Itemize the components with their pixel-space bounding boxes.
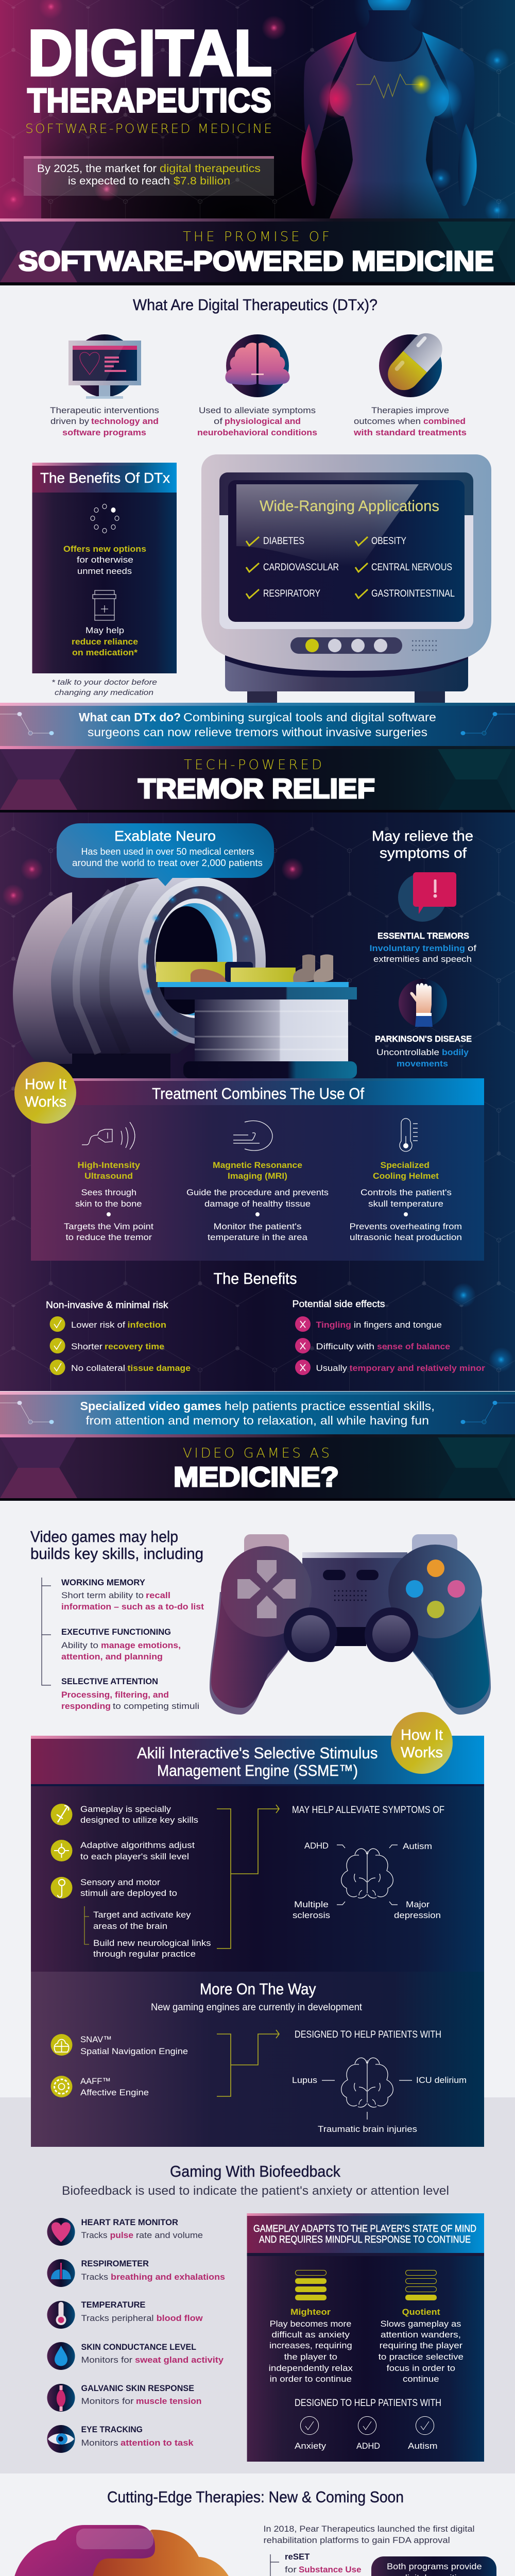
heading: what are digital therapeutics: What Are Digital Therapeutics (DTx)? <box>133 296 377 314</box>
column: Quotient <box>379 2270 464 2384</box>
callout: market size: is expected to reach <box>68 175 170 187</box>
list: how the engine works: to each player's skill level <box>80 1852 189 1861</box>
section heading band: tech-powered tremor relief: TREMOR RELIEF <box>138 773 375 804</box>
callout: Exablate Neuro: Exablate Neuro <box>114 828 216 844</box>
column: high-intensity ultrasound <box>64 1122 153 1242</box>
list: key skills <box>42 1578 204 1711</box>
panel: benefits of DTx <box>32 463 177 673</box>
column: Mighteor: Mighteor <box>290 2307 331 2317</box>
section heading band: tech-powered tremor relief <box>0 746 515 812</box>
footnote: changing any medication <box>55 688 153 697</box>
item: skin conductance level <box>47 2342 224 2370</box>
list: how the engine works: Gameplay is specially <box>80 1804 171 1814</box>
panel: gameplay adapts: GAMEPLAY ADAPTS TO THE PLAYER'S STATE OF MIND <box>253 2224 476 2234</box>
icon: ultrasound probe <box>82 1122 135 1149</box>
item: SNAV: Spatial Navigation Engine <box>80 2046 188 2056</box>
column: MRI: Guide the procedure and prevents <box>186 1188 329 1197</box>
list: potential side effects: sense of balance <box>377 1342 450 1351</box>
text: reSET programs <box>264 2524 475 2576</box>
column: MRI: damage of healthy tissue <box>204 1199 311 1209</box>
column: high-intensity ultrasound: Ultrasound <box>84 1171 133 1181</box>
callout: Exablate Neuro: around the world to treat over 2,000 patients <box>72 858 263 868</box>
item: respirometer: RESPIROMETER <box>81 2259 149 2268</box>
checks: anxiety, ADHD, autism: Autism <box>408 2441 438 2451</box>
title <box>27 18 272 120</box>
text: reduce reliance <box>72 625 138 657</box>
icon: monitor with heart <box>68 334 141 399</box>
list: potential side effects <box>293 1299 485 1375</box>
heading: The Benefits Of DTx <box>40 470 170 486</box>
column: Mighteor <box>269 2270 353 2384</box>
badge: how it works <box>14 1062 76 1124</box>
list: non-invasive benefits: tissue damage <box>128 1363 191 1373</box>
text: Parkinson's disease: movements <box>397 1059 448 1069</box>
list: key skills: WORKING MEMORY <box>61 1578 146 1587</box>
arrow: bracket to patients <box>217 2030 279 2096</box>
text: combined with standard treatments: combined <box>423 416 466 426</box>
section heading band: the promise of software-powered medicine: THE PROMISE OF <box>183 229 330 245</box>
callout: both programs: Both programs provide <box>387 2562 482 2571</box>
section heading band: video games as medicine: MEDICINE? <box>174 1462 339 1493</box>
item: temperature: blood flow <box>157 2313 203 2323</box>
diagram: brain with disorders: Lupus <box>292 2075 317 2085</box>
text: combined with standard treatments: Therapies improve <box>371 405 449 415</box>
item: eye tracking: EYE TRACKING <box>81 2425 143 2434</box>
text: Parkinson's disease: PARKINSON'S DISEASE <box>375 1034 472 1044</box>
text: technology and software: Therapeutic interventions <box>50 405 159 415</box>
column: Quotient: continue <box>403 2374 439 2384</box>
text: reSET programs: for <box>285 2565 297 2574</box>
column: Mighteor: the player to <box>284 2352 337 2362</box>
list: how the engine works: Target and activate key <box>93 1910 191 1920</box>
callout: market size: $7.8 billion <box>174 175 230 187</box>
list: key skills: EXECUTIVE FUNCTIONING <box>61 1627 171 1637</box>
panel: treatment combines the use of: Treatment Combines The Use Of <box>152 1084 364 1103</box>
column: Mighteor: Play becomes more <box>270 2319 351 2329</box>
item: heart rate monitor: Tracks <box>81 2230 107 2240</box>
text: physiological and neurobehavioral: Used to alleviate symptoms <box>199 405 316 415</box>
checklist: CENTRAL NERVOUS <box>371 562 452 573</box>
item: galvanic skin response: muscle tension <box>136 2396 202 2406</box>
text: physiological and neurobehavioral: neurobehavioral conditions <box>197 428 317 437</box>
column: Mighteor: increases, requiring <box>269 2341 352 2350</box>
column: cooling helmet: Cooling Helmet <box>373 1171 439 1181</box>
arrow: bracket to symptoms <box>217 1805 279 1948</box>
list: potential side effects: Tingling <box>316 1320 351 1330</box>
icon: controller buttons <box>406 1560 465 1618</box>
heading: the benefits: The Benefits <box>213 1269 297 1287</box>
heading: gaming with biofeedback <box>62 2162 449 2198</box>
column: high-intensity ultrasound: Sees through <box>81 1188 136 1197</box>
control buttons <box>290 637 437 654</box>
diagram: brain with disorders: Traumatic brain injuries <box>318 2124 417 2134</box>
diagram: brain with conditions: Major <box>406 1900 430 1909</box>
text: essential tremors: extremities and speech <box>373 954 472 964</box>
text: Parkinson's disease <box>375 1034 472 1069</box>
text: physiological and neurobehavioral: physiological and <box>225 416 301 426</box>
list: how the engine works: through regular practice <box>93 1949 196 1959</box>
footnote: * talk to your doctor before <box>52 678 157 687</box>
list: how the engine works: stimuli are deployed to <box>80 1888 177 1898</box>
column: cooling helmet <box>349 1118 462 1242</box>
text: designed to help patients with: DESIGNED TO HELP PATIENTS WITH <box>295 2398 441 2409</box>
list: biofeedback sensors <box>47 2217 225 2453</box>
checklist <box>246 536 455 599</box>
illustration: MRI machine with patient <box>13 877 357 1078</box>
list: how the engine works <box>50 1804 211 1959</box>
footnote <box>52 678 157 697</box>
item: respirometer: Tracks <box>81 2272 108 2282</box>
diagram: brain with conditions: Autism <box>403 1841 432 1851</box>
illustration: colorful brain <box>12 2525 244 2576</box>
text: reSET programs: reSET <box>285 2552 310 2562</box>
list: key skills: responding <box>61 1701 111 1711</box>
text: new options: Offers new options <box>63 544 146 554</box>
title: THERAPEUTICS <box>27 81 271 120</box>
list: key skills: recall <box>146 1590 170 1600</box>
list: potential side effects: Difficulty with <box>316 1342 374 1351</box>
text: combined with standard treatments: with standard treatments <box>353 428 467 437</box>
text: designed to help patients with: DESIGNED TO HELP PATIENTS WITH <box>295 2029 441 2040</box>
item: skin conductance level: SKIN CONDUCTANCE LEVEL <box>81 2342 196 2352</box>
panel: more on the way: More On The Way <box>200 1980 316 1998</box>
callout: Exablate Neuro <box>57 823 274 886</box>
callout: market size: digital therapeutics <box>160 163 261 175</box>
column: cooling helmet: Controls the patient's <box>360 1188 452 1197</box>
column: Quotient: Quotient <box>402 2307 440 2317</box>
checks: anxiety, ADHD, autism: Anxiety <box>295 2441 327 2451</box>
list: non-invasive benefits: Lower risk of <box>71 1320 125 1330</box>
callout: what can DTx do: What can DTx do? <box>79 710 181 724</box>
column: Quotient: focus in order to <box>387 2363 455 2373</box>
panel: more on the way: New gaming engines are currently in development <box>151 2002 363 2013</box>
callout: market size <box>24 156 274 196</box>
text: reSET programs: Substance Use <box>299 2565 362 2574</box>
text: Parkinson's disease: Uncontrollable <box>376 1047 439 1057</box>
section background: biofeedback <box>0 2097 515 2473</box>
diagram: brain with conditions: depression <box>394 1910 441 1920</box>
badge: how it works: How It <box>25 1076 66 1093</box>
text: technology and software <box>50 405 159 437</box>
heading: gaming with biofeedback: Biofeedback is used to indicate the patient's anxiety or attention level <box>62 2184 449 2198</box>
text: combined with standard treatments <box>353 405 467 437</box>
section heading band: video games as medicine <box>0 1434 515 1501</box>
icon: joysticks <box>284 1607 418 1662</box>
list: key skills: SELECTIVE ATTENTION <box>61 1676 158 1686</box>
item: eye tracking: Monitors <box>81 2438 118 2448</box>
text: may help alleviate symptoms of: MAY HELP ALLEVIATE SYMPTOMS OF <box>292 1805 444 1816</box>
item: SNAV: SNAV™ <box>80 2035 112 2044</box>
item: heart rate monitor: HEART RATE MONITOR <box>81 2217 178 2227</box>
column: Quotient: attention wanders, <box>381 2330 461 2340</box>
panel: Akili Interactive SSME: Akili Interactive's Selective Stimulus <box>137 1744 378 1762</box>
text: combined with standard treatments: outcomes when <box>354 416 421 426</box>
heading: video games build key skills: Video games may help <box>30 1528 178 1546</box>
callout: specialized video games <box>0 1392 515 1434</box>
icon: brain <box>226 334 289 397</box>
text: physiological and neurobehavioral <box>197 405 317 437</box>
item: heart rate monitor <box>47 2217 203 2246</box>
diagram: brain with conditions: Multiple <box>294 1900 329 1909</box>
badge: how it works <box>391 1712 453 1774</box>
list: non-invasive benefits: Non-invasive & minimal risk <box>46 1300 169 1310</box>
checklist: DIABETES <box>263 536 304 547</box>
list: non-invasive benefits <box>46 1300 191 1375</box>
checklist: RESPIRATORY <box>263 588 320 599</box>
text: technology and software: software programs <box>62 428 146 437</box>
column: MRI: Imaging (MRI) <box>228 1171 287 1181</box>
item: respirometer <box>47 2259 225 2287</box>
callout: what can DTx do: Combining surgical tools and digital software <box>183 710 436 724</box>
column: Mighteor: in order to continue <box>270 2374 352 2384</box>
list: potential side effects: in fingers and tongue <box>354 1320 442 1330</box>
item: temperature: TEMPERATURE <box>81 2300 145 2310</box>
callout: specialized video games: from attention and memory to relaxation, all while having fun <box>85 1414 429 1427</box>
checks: anxiety, ADHD, autism: ADHD <box>356 2441 380 2451</box>
list: how the engine works: Adaptive algorithms adjust <box>80 1840 195 1850</box>
section heading band: video games as medicine: VIDEO GAMES AS <box>183 1446 330 1461</box>
text: reduce reliance: reduce reliance <box>72 637 138 647</box>
item: heart rate monitor: pulse <box>110 2230 133 2240</box>
list: key skills: Processing, filtering, and <box>61 1690 169 1700</box>
column: high-intensity ultrasound: High-Intensity <box>77 1160 141 1170</box>
text: essential tremors <box>370 931 476 964</box>
item: eye tracking <box>47 2425 194 2453</box>
section heading band: the promise of software-powered medicine <box>0 218 515 285</box>
list: key skills: Ability to <box>61 1640 98 1650</box>
callout: what can DTx do: surgeons can now relieve tremors without invasive surgeries <box>88 725 427 739</box>
panel: gameplay adapts <box>247 2213 484 2462</box>
column: MRI: temperature in the area <box>208 1232 308 1242</box>
icon: thermometer <box>400 1118 418 1151</box>
diagram: brain with conditions: ADHD <box>304 1841 329 1851</box>
icon: alert speech bubble <box>398 872 456 922</box>
text: new options: unmet needs <box>77 566 132 576</box>
callout: both programs <box>371 2556 496 2576</box>
item: SNAV <box>50 2034 188 2056</box>
column: Quotient: requiring the player <box>380 2341 462 2350</box>
text: reduce reliance: May help <box>85 625 124 635</box>
icon: d-pad <box>237 1560 296 1618</box>
item: eye tracking: attention to task <box>121 2438 194 2448</box>
list: non-invasive benefits: recovery time <box>105 1342 164 1351</box>
panel: treatment combines the use of <box>14 1062 484 1261</box>
item: galvanic skin response: GALVANIC SKIN RESPONSE <box>81 2383 194 2393</box>
text: physiological and neurobehavioral: of <box>214 416 222 426</box>
badge: how it works: Works <box>401 1744 443 1761</box>
panel: Akili Interactive SSME <box>31 1712 484 1972</box>
panel: hero <box>0 0 515 223</box>
checks: anxiety, ADHD, autism <box>295 2416 438 2451</box>
icon: medicine bottle <box>93 590 116 620</box>
badge: how it works: How It <box>401 1727 443 1743</box>
illustration: glowing human torso <box>301 0 477 218</box>
list: how the engine works: areas of the brain <box>93 1921 167 1931</box>
title: DIGITAL <box>28 18 272 89</box>
icon: MRI scanner <box>233 1121 272 1150</box>
column: high-intensity ultrasound: Targets the Vim point <box>64 1222 153 1231</box>
illustration: medical device with applications list <box>201 454 491 703</box>
list: potential side effects: Potential side effects <box>293 1299 385 1309</box>
heading: may relieve the symptoms of: May relieve the <box>372 828 473 844</box>
panel: more on the way <box>31 1972 484 2147</box>
heading: cutting-edge therapies: Cutting-Edge Therapies: New & Coming Soon <box>107 2488 404 2506</box>
diagram: brain with conditions <box>293 1841 441 1920</box>
callout: specialized video games: help patients practice essential skills, <box>225 1399 435 1413</box>
column: high-intensity ultrasound: to reduce the tremor <box>66 1232 152 1242</box>
checklist: OBESITY <box>371 536 406 547</box>
column: Quotient: Slows gameplay as <box>380 2319 461 2329</box>
list: how the engine works: Sensory and motor <box>80 1877 160 1887</box>
icon: loading dots <box>91 504 119 533</box>
item: skin conductance level: sweat gland activity <box>135 2355 224 2365</box>
list: non-invasive benefits: infection <box>128 1320 166 1330</box>
column: cooling helmet: skull temperature <box>368 1199 443 1209</box>
text: reduce reliance: on medication* <box>72 648 138 657</box>
text: essential tremors: ESSENTIAL TREMORS <box>377 931 469 941</box>
column: Mighteor: difficult as anxiety <box>271 2330 350 2340</box>
checklist: GASTROINTESTINAL <box>371 588 455 599</box>
diagram: brain with disorders <box>292 2058 467 2134</box>
callout: specialized video games: Specialized video games <box>80 1399 221 1413</box>
item: skin conductance level: Monitors for <box>81 2355 132 2365</box>
heading: video games build key skills: builds key skills, including <box>30 1545 203 1563</box>
list: potential side effects: Usually <box>316 1363 348 1373</box>
text: essential tremors: of <box>468 943 476 953</box>
callout: what can DTx do <box>0 703 515 746</box>
column: high-intensity ultrasound: skin to the bone <box>75 1199 142 1209</box>
column: Mighteor: independently relax <box>269 2363 353 2373</box>
column: cooling helmet: ultrasonic heat production <box>350 1232 462 1242</box>
list: key skills: to competing stimuli <box>113 1701 199 1711</box>
item: galvanic skin response <box>47 2383 202 2412</box>
column: Quotient: to practice selective <box>379 2352 464 2362</box>
item: AAFF <box>50 2076 149 2097</box>
icon: raised hand <box>399 979 447 1027</box>
panel: Akili Interactive SSME: Management Engine (SSME™) <box>157 1761 358 1780</box>
text: technology and software: driven by <box>50 416 90 426</box>
icon: pill capsule <box>379 327 449 397</box>
diagram: brain with conditions: sclerosis <box>293 1910 330 1920</box>
heading: gaming with biofeedback: Gaming With Biofeedback <box>170 2162 340 2180</box>
text: new options: for otherwise <box>77 555 133 565</box>
column: MRI: Monitor the patient's <box>213 1222 302 1231</box>
callout: market size: By 2025, the market for <box>37 163 157 175</box>
heading: Wide-Ranging Applications <box>260 498 439 515</box>
list: key skills: Short term ability to <box>61 1590 144 1600</box>
panel: gameplay adapts: AND REQUIRES MINDFUL RESPONSE TO CONTINUE <box>259 2234 471 2245</box>
item: temperature <box>47 2300 203 2329</box>
column: cooling helmet: Prevents overheating from <box>349 1222 462 1231</box>
text: technology and software: technology and <box>91 416 159 426</box>
item: AAFF: AAFF™ <box>80 2076 111 2086</box>
column: cooling helmet: Specialized <box>380 1160 430 1170</box>
item: galvanic skin response: Monitors for <box>81 2396 134 2406</box>
column: MRI <box>186 1121 329 1242</box>
column: MRI: Magnetic Resonance <box>213 1160 302 1170</box>
panel: tremor relief background <box>0 812 515 1391</box>
list: key skills: information – such as a to-do list <box>61 1602 204 1612</box>
checklist: CARDIOVASCULAR <box>263 562 339 573</box>
list: key skills: manage emotions, <box>101 1640 181 1650</box>
illustration: game controller <box>210 1534 491 1715</box>
list: non-invasive benefits: No collateral <box>71 1363 125 1373</box>
text: reSET programs: rehabilitation platforms to gain FDA approval <box>264 2535 450 2545</box>
item: AAFF: Affective Engine <box>80 2088 149 2097</box>
item: heart rate monitor: rate and volume <box>136 2230 203 2240</box>
list: key skills: attention, and planning <box>61 1652 163 1662</box>
section heading band: the promise of software-powered medicine: SOFTWARE-POWERED MEDICINE <box>19 246 494 277</box>
section heading band: tech-powered tremor relief: TECH-POWERED <box>184 757 322 773</box>
list: how the engine works: designed to utilize key skills <box>80 1815 198 1825</box>
text: reSET programs: In 2018, Pear Therapeutics launched the first digital <box>264 2524 475 2534</box>
text: essential tremors: Involuntary trembling <box>370 943 465 953</box>
diagram: brain with disorders: ICU delirium <box>416 2075 467 2085</box>
badge: how it works: Works <box>25 1094 66 1110</box>
subtitle: SOFTWARE-POWERED MEDICINE <box>25 121 272 136</box>
list: potential side effects: temporary and relatively minor <box>349 1363 485 1373</box>
heading: may relieve the symptoms of <box>372 828 473 861</box>
item: temperature: Tracks peripheral <box>81 2313 153 2323</box>
list: how the engine works: Build new neurological links <box>93 1938 211 1948</box>
list: non-invasive benefits: Shorter <box>71 1342 102 1351</box>
text: Parkinson's disease: bodily <box>442 1047 469 1057</box>
heading: may relieve the symptoms of: symptoms of <box>380 845 467 861</box>
callout: Exablate Neuro: Has been used in over 50 medical centers <box>81 846 254 857</box>
heading: video games build key skills <box>30 1528 203 1563</box>
text: new options <box>63 544 146 576</box>
item: respirometer: breathing and exhalations <box>111 2272 225 2282</box>
